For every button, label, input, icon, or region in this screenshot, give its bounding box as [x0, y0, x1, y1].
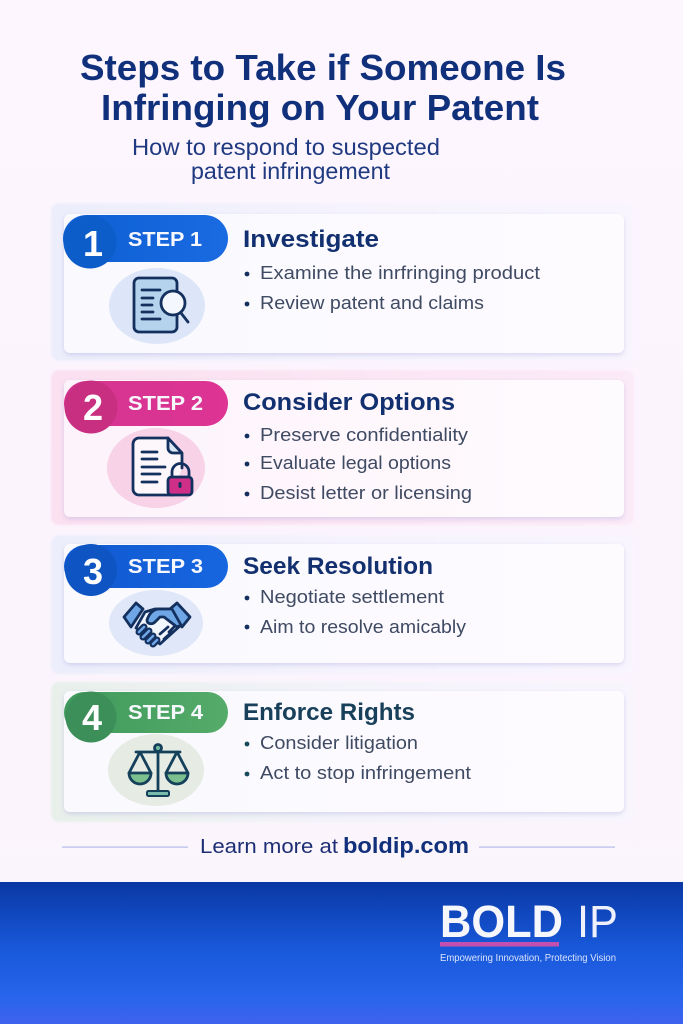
step 4 heading: Enforce Rights — [243, 699, 415, 726]
step 4 bullets: Consider litigation — [260, 732, 418, 753]
panel: step 2 consider options — [51, 370, 634, 525]
panel: step 4 enforce rights — [51, 682, 634, 822]
step 3 heading: Seek Resolution — [243, 553, 433, 580]
step 3 badge: 3 — [83, 551, 103, 592]
subtitle: How to respond to suspected — [132, 134, 440, 160]
step 2 bullets — [245, 424, 472, 503]
logo: Bold IP: IP — [577, 896, 618, 947]
learn more link — [200, 833, 469, 858]
title: Infringing on Your Patent — [101, 87, 539, 128]
step 4 badge — [64, 692, 228, 742]
step 1 bullets: Examine the inrfringing product — [260, 262, 540, 283]
step 4 bullets — [245, 732, 471, 783]
panel: step 1 investigate — [51, 203, 634, 361]
step 4 badge: 4 — [82, 697, 102, 738]
step 1 badge: STEP 1 — [128, 229, 202, 251]
logo: Bold IP: BOLD — [440, 896, 563, 947]
step 1 bullets: Review patent and claims — [260, 292, 484, 313]
step 2 bullets: Preserve confidentiality — [260, 424, 469, 445]
step 3 badge — [64, 544, 228, 596]
step 4 bullets: Act to stop infringement — [260, 762, 471, 783]
step 2 card — [64, 380, 624, 517]
title: Steps to Take if Someone Is — [80, 47, 566, 88]
footer band — [0, 882, 683, 1024]
step 3 badge: STEP 3 — [128, 556, 203, 578]
step 1 card — [64, 214, 624, 353]
step 1 badge — [63, 215, 228, 268]
step 2 badge: 2 — [83, 387, 103, 428]
step 2 bullets: Desist letter or licensing — [260, 482, 472, 503]
icon: scales of justice — [108, 734, 204, 806]
step 3 bullets — [245, 586, 467, 637]
learn more link: Learn more at — [200, 835, 338, 858]
subtitle: patent infringement — [191, 158, 391, 184]
step 2 heading: Consider Options — [243, 389, 455, 416]
logo: Bold IP — [440, 896, 618, 964]
step 1 heading: Investigate — [243, 226, 379, 253]
step 1 bullets — [245, 262, 540, 313]
title — [80, 47, 566, 128]
icon: document with padlock — [107, 428, 205, 508]
step 4 card — [64, 691, 624, 812]
subtitle — [132, 134, 440, 184]
panel: step 3 seek resolution — [51, 535, 634, 674]
step 1 badge: 1 — [83, 223, 103, 264]
step 3 card — [64, 544, 624, 663]
step 3 bullets: Negotiate settlement — [260, 586, 444, 607]
step 3 bullets: Aim to resolve amicably — [260, 616, 467, 637]
logo: Bold IP: Empowering Innovation, Protecting Vision — [440, 953, 616, 964]
step 2 bullets: Evaluate legal options — [260, 452, 451, 473]
icon: document with magnifier — [109, 268, 205, 344]
step 4 badge: STEP 4 — [128, 702, 204, 724]
step 2 badge: STEP 2 — [128, 393, 203, 415]
icon: handshake — [109, 590, 203, 656]
step 2 badge — [64, 380, 228, 434]
learn more link: boldip.com — [343, 833, 469, 858]
